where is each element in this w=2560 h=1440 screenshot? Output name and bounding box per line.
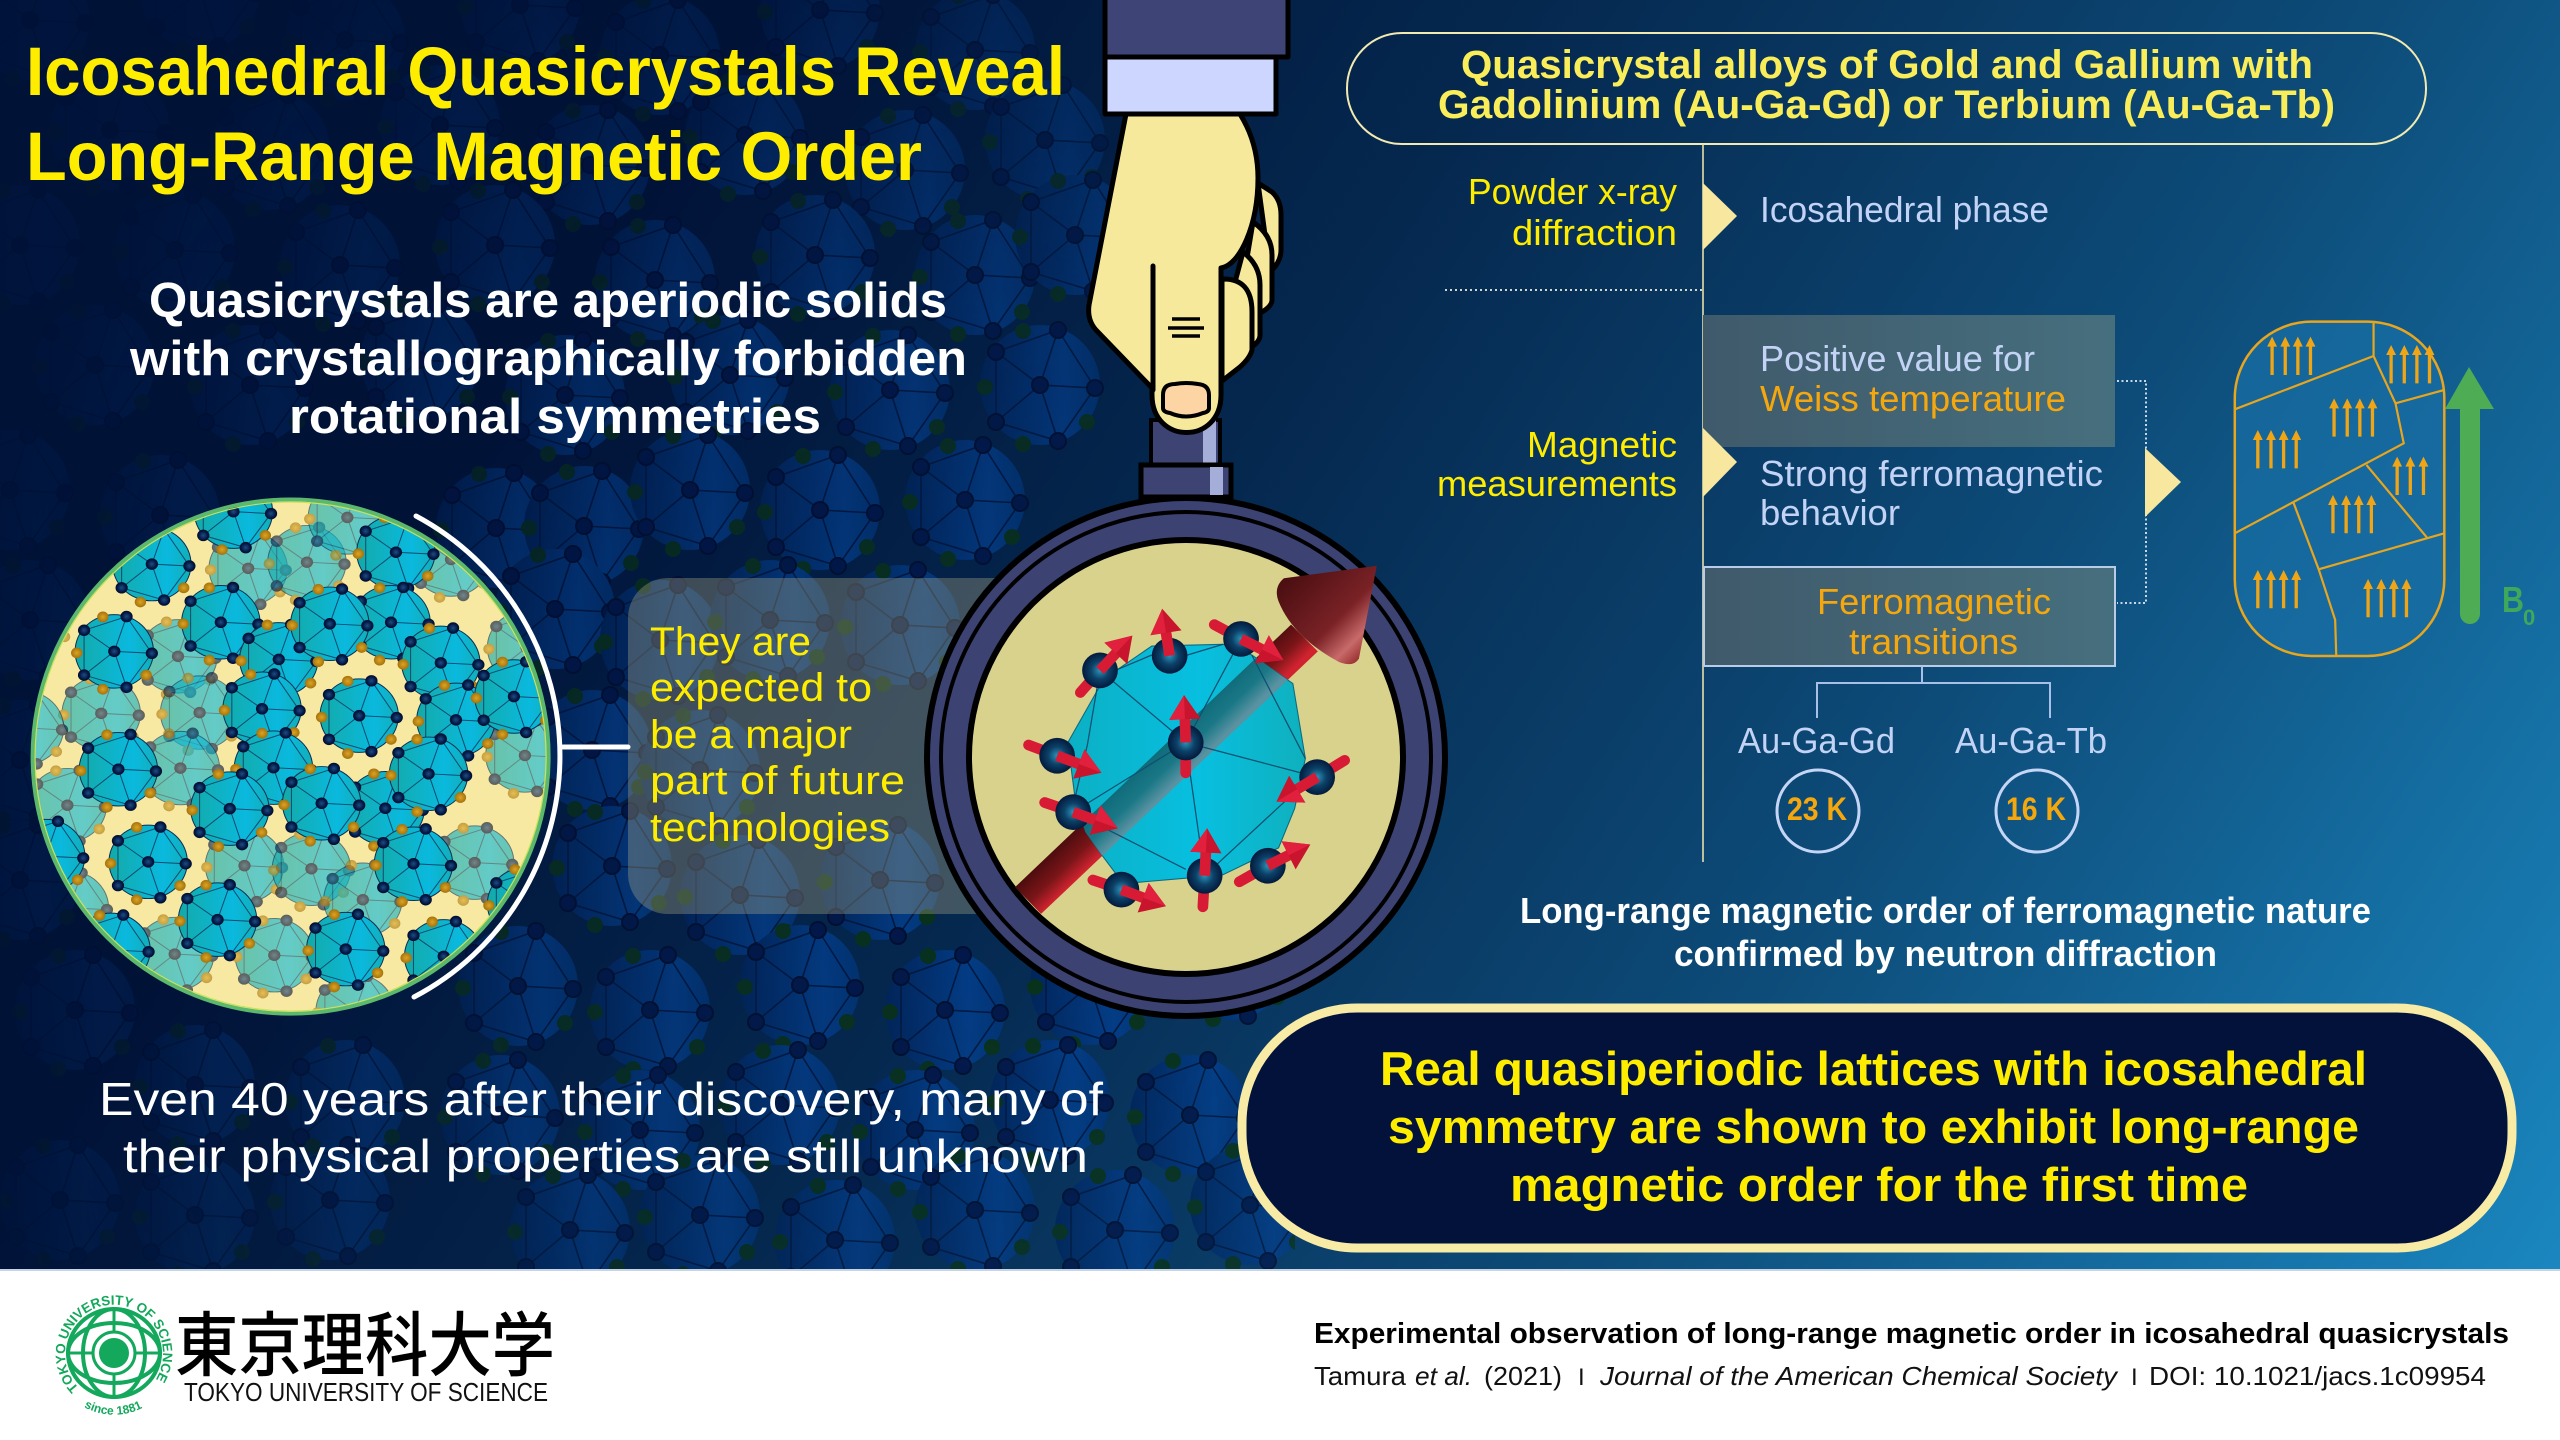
panel: ferromagnetic transitions: transitions [1849,621,2018,662]
result: icosahedral phase: Icosahedral phase [1760,189,2049,230]
text: long-range order confirmed [1520,890,2371,974]
step: powder x-ray diffraction: diffraction [1512,212,1677,253]
panel: future technologies callout [628,578,1148,914]
arrow: magnetic measurements [1703,428,1737,497]
citation: DOI: 10.1021/jacs.1c09954 [2149,1361,2486,1391]
gadolinium atoms [1039,621,1335,907]
magnetization arrow head [1277,566,1377,664]
heading: quasicrystal definition: rotational symmetries [289,390,821,444]
title: Icosahedral Quasicrystals Reveal [26,33,1065,110]
arrow: magnetic field B0: B [2502,579,2524,620]
icon: hand holding magnifier [1089,0,1288,432]
heading: quasicrystal definition: with crystallographically forbidden [129,332,967,386]
alloy: Au-Ga-Gd: 23 K [1787,791,1847,827]
panel: Weiss temperature [1703,315,2115,447]
flow chart axis [1702,144,1704,862]
header pill: alloys: Gadolinium (Au-Ga-Gd) or Terbium (Au-Ga-Tb) [1438,83,2335,127]
footer [0,1270,2560,1440]
conclusion pill: symmetry are shown to exhibit long-range [1388,1100,2359,1153]
step: powder x-ray diffraction [1468,171,1677,253]
step: powder x-ray diffraction: Powder x-ray [1468,171,1677,212]
arrow: magnetic field B0 [2445,367,2535,630]
panel: Weiss temperature: Weiss temperature [1760,378,2066,419]
text: long-range order confirmed: Long-range magnetic order of ferromagnetic nature [1520,890,2371,931]
step: magnetic measurements [1437,424,1677,504]
background quasicrystal pattern [0,0,1313,1307]
even 40 years text: their physical properties are still unknown [123,1130,1088,1182]
step: magnetic measurements: Magnetic [1527,424,1677,465]
title [26,33,1065,195]
panel: Weiss temperature: Positive value for [1760,338,2035,379]
heading: quasicrystal definition: Quasicrystals are aperiodic solids [149,274,947,328]
even 40 years text [99,1073,1103,1182]
citation: Tamura [1314,1361,1407,1391]
alloy: Au-Ga-Tb [1955,720,2107,852]
magnifier handle [1141,420,1231,497]
text: ferromagnetic behavior: behavior [1760,492,1900,533]
icosahedron [1068,644,1306,883]
heading: quasicrystal definition [129,274,967,444]
spin arrows [1052,606,1325,921]
header pill: alloys: Quasicrystal alloys of Gold and Gallium with [1461,43,2313,87]
arrow: to domains [2145,448,2181,517]
title: Long-Range Magnetic Order [26,118,922,195]
spin stubs [1029,625,1345,907]
arrow: magnetic field B0: 0 [2523,605,2535,630]
panel: future technologies callout: part of future [650,759,905,803]
white bracket connecting circle to callout [414,516,628,997]
text: ferromagnetic behavior [1760,453,2103,533]
logo: Tokyo University of Science emblem: TOKYO UNIVERSITY OF SCIENCE [56,1295,172,1394]
step: magnetic measurements: measurements [1437,463,1677,504]
logo: Tokyo University of Science emblem: since 1881 [84,1401,142,1415]
panel: ferromagnetic transitions: Ferromagnetic [1817,581,2051,622]
citation: Experimental observation of long-range magnetic order in icosahedral quasicrystals [1314,1318,2509,1350]
citation: I [1578,1364,1585,1391]
magnifying glass [924,420,1448,1019]
magnifier rings [924,495,1448,1019]
quasicrystal lattice circle [30,498,551,1016]
conclusion pill: Real quasiperiodic lattices with icosahedral [1380,1042,2367,1095]
lens contents: icosahedron with magnetic moments [1015,566,1377,921]
conclusion pill: magnetic order for the first time [1510,1158,2248,1211]
dotted connector [2117,381,2146,603]
citation: (2021) [1484,1361,1562,1391]
text: long-range order confirmed: confirmed by neutron diffraction [1674,933,2217,974]
large magnetization arrow shaft [1015,625,1318,914]
text: ferromagnetic behavior: Strong ferromagnetic [1760,453,2103,494]
arrow: powder to phase [1703,183,1737,250]
even 40 years text: Even 40 years after their discovery, many of [99,1073,1103,1125]
header pill: alloys [1347,33,2426,144]
logo: university name: TOKYO UNIVERSITY OF SCIENCE [184,1377,548,1407]
panel: future technologies callout: expected to [650,666,872,710]
panel: future technologies callout: They are [650,620,811,664]
logo: university name: 東京理科大学 [175,1307,555,1385]
alloy: Au-Ga-Gd [1738,720,1895,852]
sleeve and cuff [1105,0,1288,114]
citation: Journal of the American Chemical Society [1599,1361,2119,1391]
alloy: Au-Ga-Tb: Au-Ga-Tb [1955,720,2107,761]
citation: I [2131,1364,2138,1391]
panel: ferromagnetic transitions [1704,567,2115,666]
panel: future technologies callout: be a major [650,713,852,757]
alloy: Au-Ga-Gd: Au-Ga-Gd [1738,720,1895,761]
conclusion pill [1242,1008,2512,1248]
ferromagnetic domains diagram [2235,322,2444,656]
citation: et al. [1415,1361,1472,1391]
citation [1314,1318,2509,1391]
panel: future technologies callout: technologies [650,806,890,850]
tree connector [1817,666,2050,718]
alloy: Au-Ga-Tb: 16 K [2006,791,2066,827]
